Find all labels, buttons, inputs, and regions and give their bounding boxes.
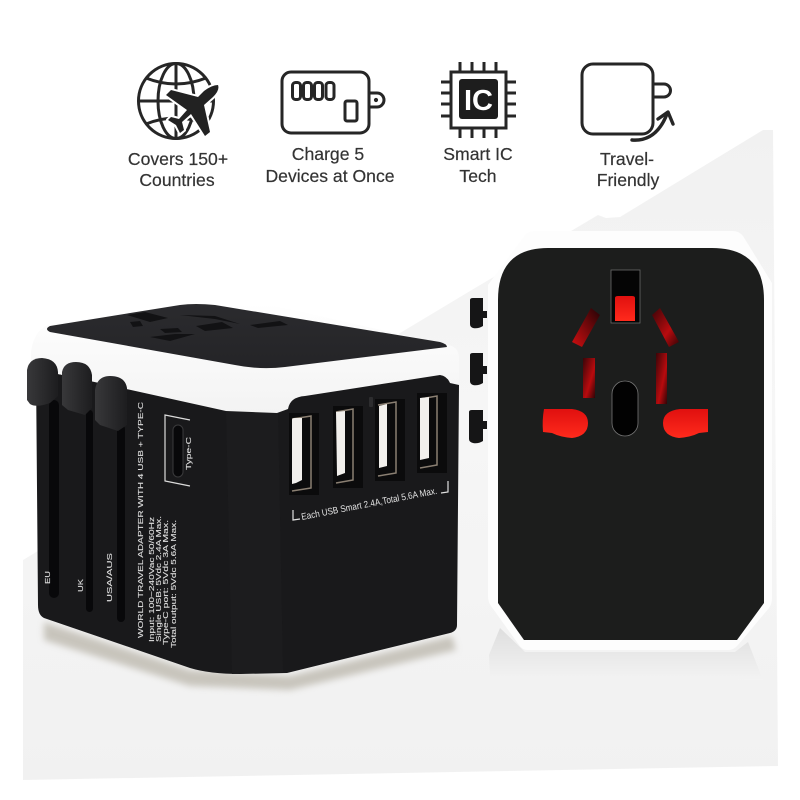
reflection under right adapter [489,628,763,680]
top earth slot [611,270,640,323]
side printed labels: Total output: 5Vdc 5.6A Max. [169,520,178,648]
type-C port [165,415,193,486]
side printed labels: Type-C port: 5Vdc 3A Max. [161,520,170,645]
shadow under left adapter [44,622,456,690]
caption: travel-friendly: Travel- [600,149,654,169]
white band [31,303,459,413]
vertical slot right [656,353,667,404]
diagonal slot left [572,308,600,347]
USB rating text: Each USB Smart 2.4A,Total 5.6A Max. [300,486,438,523]
side printed labels: WORLD TRAVEL ADAPTER WITH 4 USB + TYPE-C [136,401,145,638]
icon: travel plug with arrow [582,64,673,140]
right adapter: socket face view [488,231,772,650]
type-C port: Type-C [184,436,193,470]
diagonal slot right [652,308,679,347]
side printed labels: Input: 100~240Vac 50/60Hz [147,517,156,642]
vertical slot left [583,358,595,398]
side printed labels: EU [43,571,52,584]
top face socket slots [127,312,288,341]
side printed labels [43,401,178,648]
caption: travel-friendly: Friendly [597,170,659,190]
corner highlight [226,410,283,674]
caption: smart IC tech: Tech [459,166,497,186]
plug sliders [27,358,127,622]
side printed labels: USA/AUS [105,553,114,602]
black face plate [498,248,764,640]
caption: covers 150+ countries: Covers 150+ [128,149,228,169]
red contact right [663,409,708,438]
caption: charge 5 devices at once: Charge 5 [292,144,364,164]
icon: globe with plane [138,63,218,139]
icon: smart IC chip: IC [464,85,493,117]
caption: charge 5 devices at once: Devices at Once [265,166,395,186]
USB ports [289,393,447,495]
top face [47,304,447,368]
left adapter: angled product view [27,303,459,674]
icon: charger with ports [282,72,384,133]
side printed labels: UK [76,579,85,592]
side tabs of right adapter [469,298,487,443]
caption: smart IC tech: Smart IC [443,144,513,164]
adapter body [36,360,459,674]
red contact left [543,409,588,438]
caption: covers 150+ countries: Countries [139,170,215,190]
background panel: light grey diagonal [23,130,778,780]
side printed labels: Single USB: 5Vdc 2.4A Max. [154,516,163,642]
icon: smart IC chip [441,62,516,138]
centre oval hole [612,381,638,436]
white housing [488,231,772,650]
